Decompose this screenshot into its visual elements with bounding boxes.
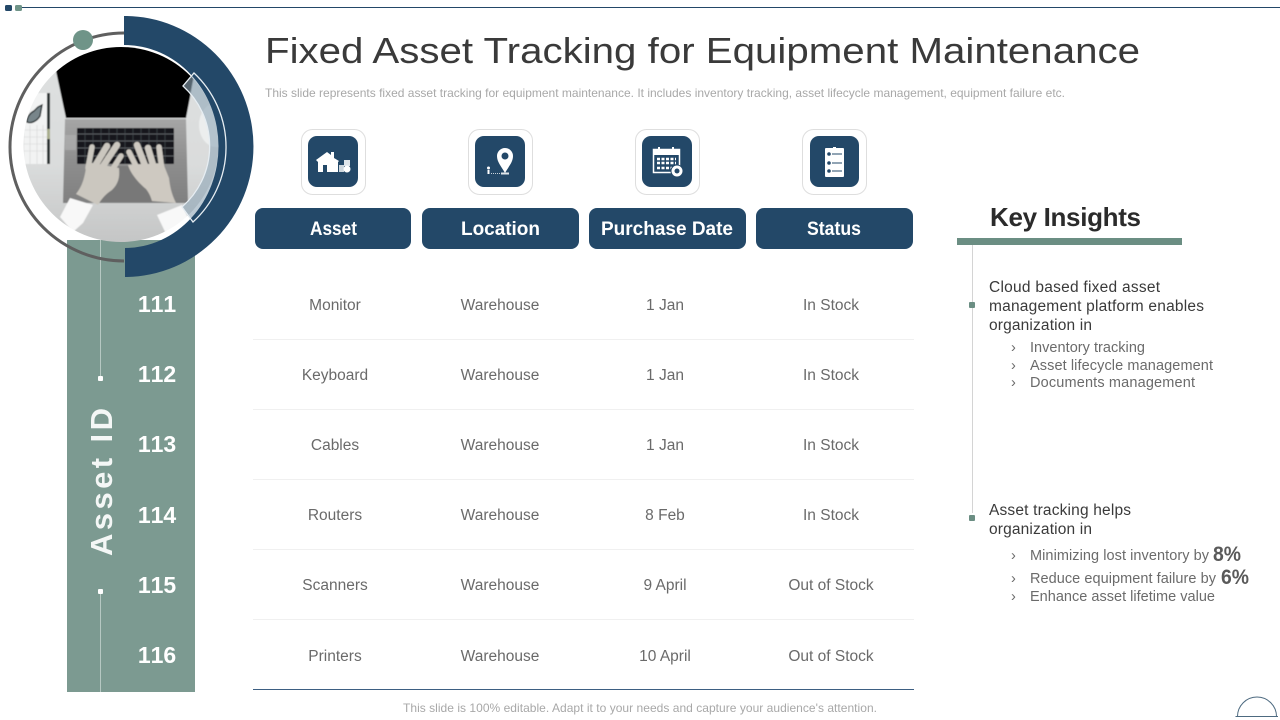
icon: calendar [636,130,700,194]
asset id numbers: 114 [138,502,176,528]
trackpad [102,166,151,201]
insight one: › [1011,375,1016,391]
column header: purchase date: Purchase Date [601,219,733,240]
insight one: organization in [989,317,1092,334]
key insights heading: Key Insights [990,202,1141,232]
asset id numbers: 116 [138,642,176,668]
ring dot [73,30,93,50]
insight one: › [1011,340,1016,356]
asset id numbers [138,291,176,668]
row: routers: Routers [308,507,362,524]
row: monitor: In Stock [803,297,859,314]
laptop screen [56,40,195,118]
corner semicircle [1236,697,1278,716]
panel: asset id band [67,240,195,692]
insight one: Inventory tracking [1030,340,1145,356]
insight two: Minimizing lost inventory by [1030,548,1210,564]
column header: purchase date [589,208,746,249]
row: routers: 8 Feb [645,507,685,524]
row: printers: Warehouse [461,648,539,665]
row: cables [311,437,859,454]
sleeves [60,198,93,232]
footer note: This slide is 100% editable. Adapt it to your needs and capture your audience's attention. [403,701,877,715]
row: scanners: 9 April [643,577,687,594]
subtitle: This slide represents fixed asset tracking for equipment maintenance. It includes inventory tracking, asset lifecycle management, equipment failure etc. [265,86,1065,100]
left hand [76,145,121,205]
insight one: Asset lifecycle management [1030,358,1213,374]
asset id numbers: 112 [138,361,176,387]
asset id numbers: 111 [138,291,176,317]
row: printers: Printers [308,648,362,665]
insight two: Enhance asset lifetime value [1030,589,1215,605]
heading bar [957,238,1182,245]
row: monitor: Warehouse [461,297,539,314]
plate [199,114,209,144]
row: cables: Cables [311,437,359,454]
insight two: Reduce equipment failure by [1030,571,1217,587]
insight one: › [1011,358,1016,374]
laptop base [63,119,188,203]
insight two: › [1011,589,1016,605]
notebook [24,93,50,164]
insight one [989,279,1213,391]
icon: asset house [302,130,366,194]
insight one: Documents management [1030,375,1195,391]
row: keyboard: 1 Jan [646,367,684,384]
column header: status: Status [807,219,861,240]
insight two [989,502,1249,605]
row: scanners: Scanners [302,577,368,594]
row: printers: Out of Stock [788,648,874,665]
keyboard [77,128,174,164]
row: scanners: Out of Stock [788,577,874,594]
row: scanners: Warehouse [461,577,539,594]
icon: status checklist [802,130,866,194]
insight two: › [1011,571,1016,587]
row: monitor: 1 Jan [646,297,684,314]
photo: hands typing on laptop [24,47,218,242]
row: keyboard: In Stock [803,367,859,384]
row: routers: In Stock [803,507,859,524]
blue arc [124,16,253,277]
row: printers [308,648,874,665]
insight one: management platform enables [989,298,1204,315]
row: cables: 1 Jan [646,437,684,454]
insight two: Asset tracking helps [989,502,1131,519]
timeline [969,245,975,521]
asset id numbers: 115 [138,572,176,598]
right hand [128,145,176,203]
row: cables: Warehouse [461,437,539,454]
row: monitor [309,297,859,314]
title: Fixed Asset Tracking for Equipment Maintenance [265,30,1140,71]
row: keyboard: Keyboard [302,367,368,384]
row: scanners [302,577,874,594]
panel: key insights [957,202,1249,605]
column header: status [756,208,913,249]
insight two: 6% [1221,566,1249,589]
insight two: 8% [1213,543,1241,566]
row: routers: Warehouse [461,507,539,524]
column header: asset: Asset [310,219,358,240]
row: cables: In Stock [803,437,859,454]
top rule with squares [5,5,1280,11]
icon: location pin [468,130,532,194]
row: keyboard: Warehouse [461,367,539,384]
column header: asset [255,208,411,249]
arc outline [182,73,226,222]
column header: location: Location [461,219,540,240]
asset id numbers: 113 [138,431,176,457]
row: keyboard [302,367,859,384]
decorative ring [10,33,124,261]
row: monitor: Monitor [309,297,361,314]
asset id vertical label: Asset ID [84,408,119,556]
table rows [253,297,914,690]
row: printers: 10 April [639,648,691,665]
insight two: › [1011,548,1016,564]
insight one: Cloud based fixed asset [989,279,1161,296]
row: routers [308,507,859,524]
column header: location [422,208,579,249]
translucent arc overlay [182,73,226,222]
insight two: organization in [989,521,1092,538]
